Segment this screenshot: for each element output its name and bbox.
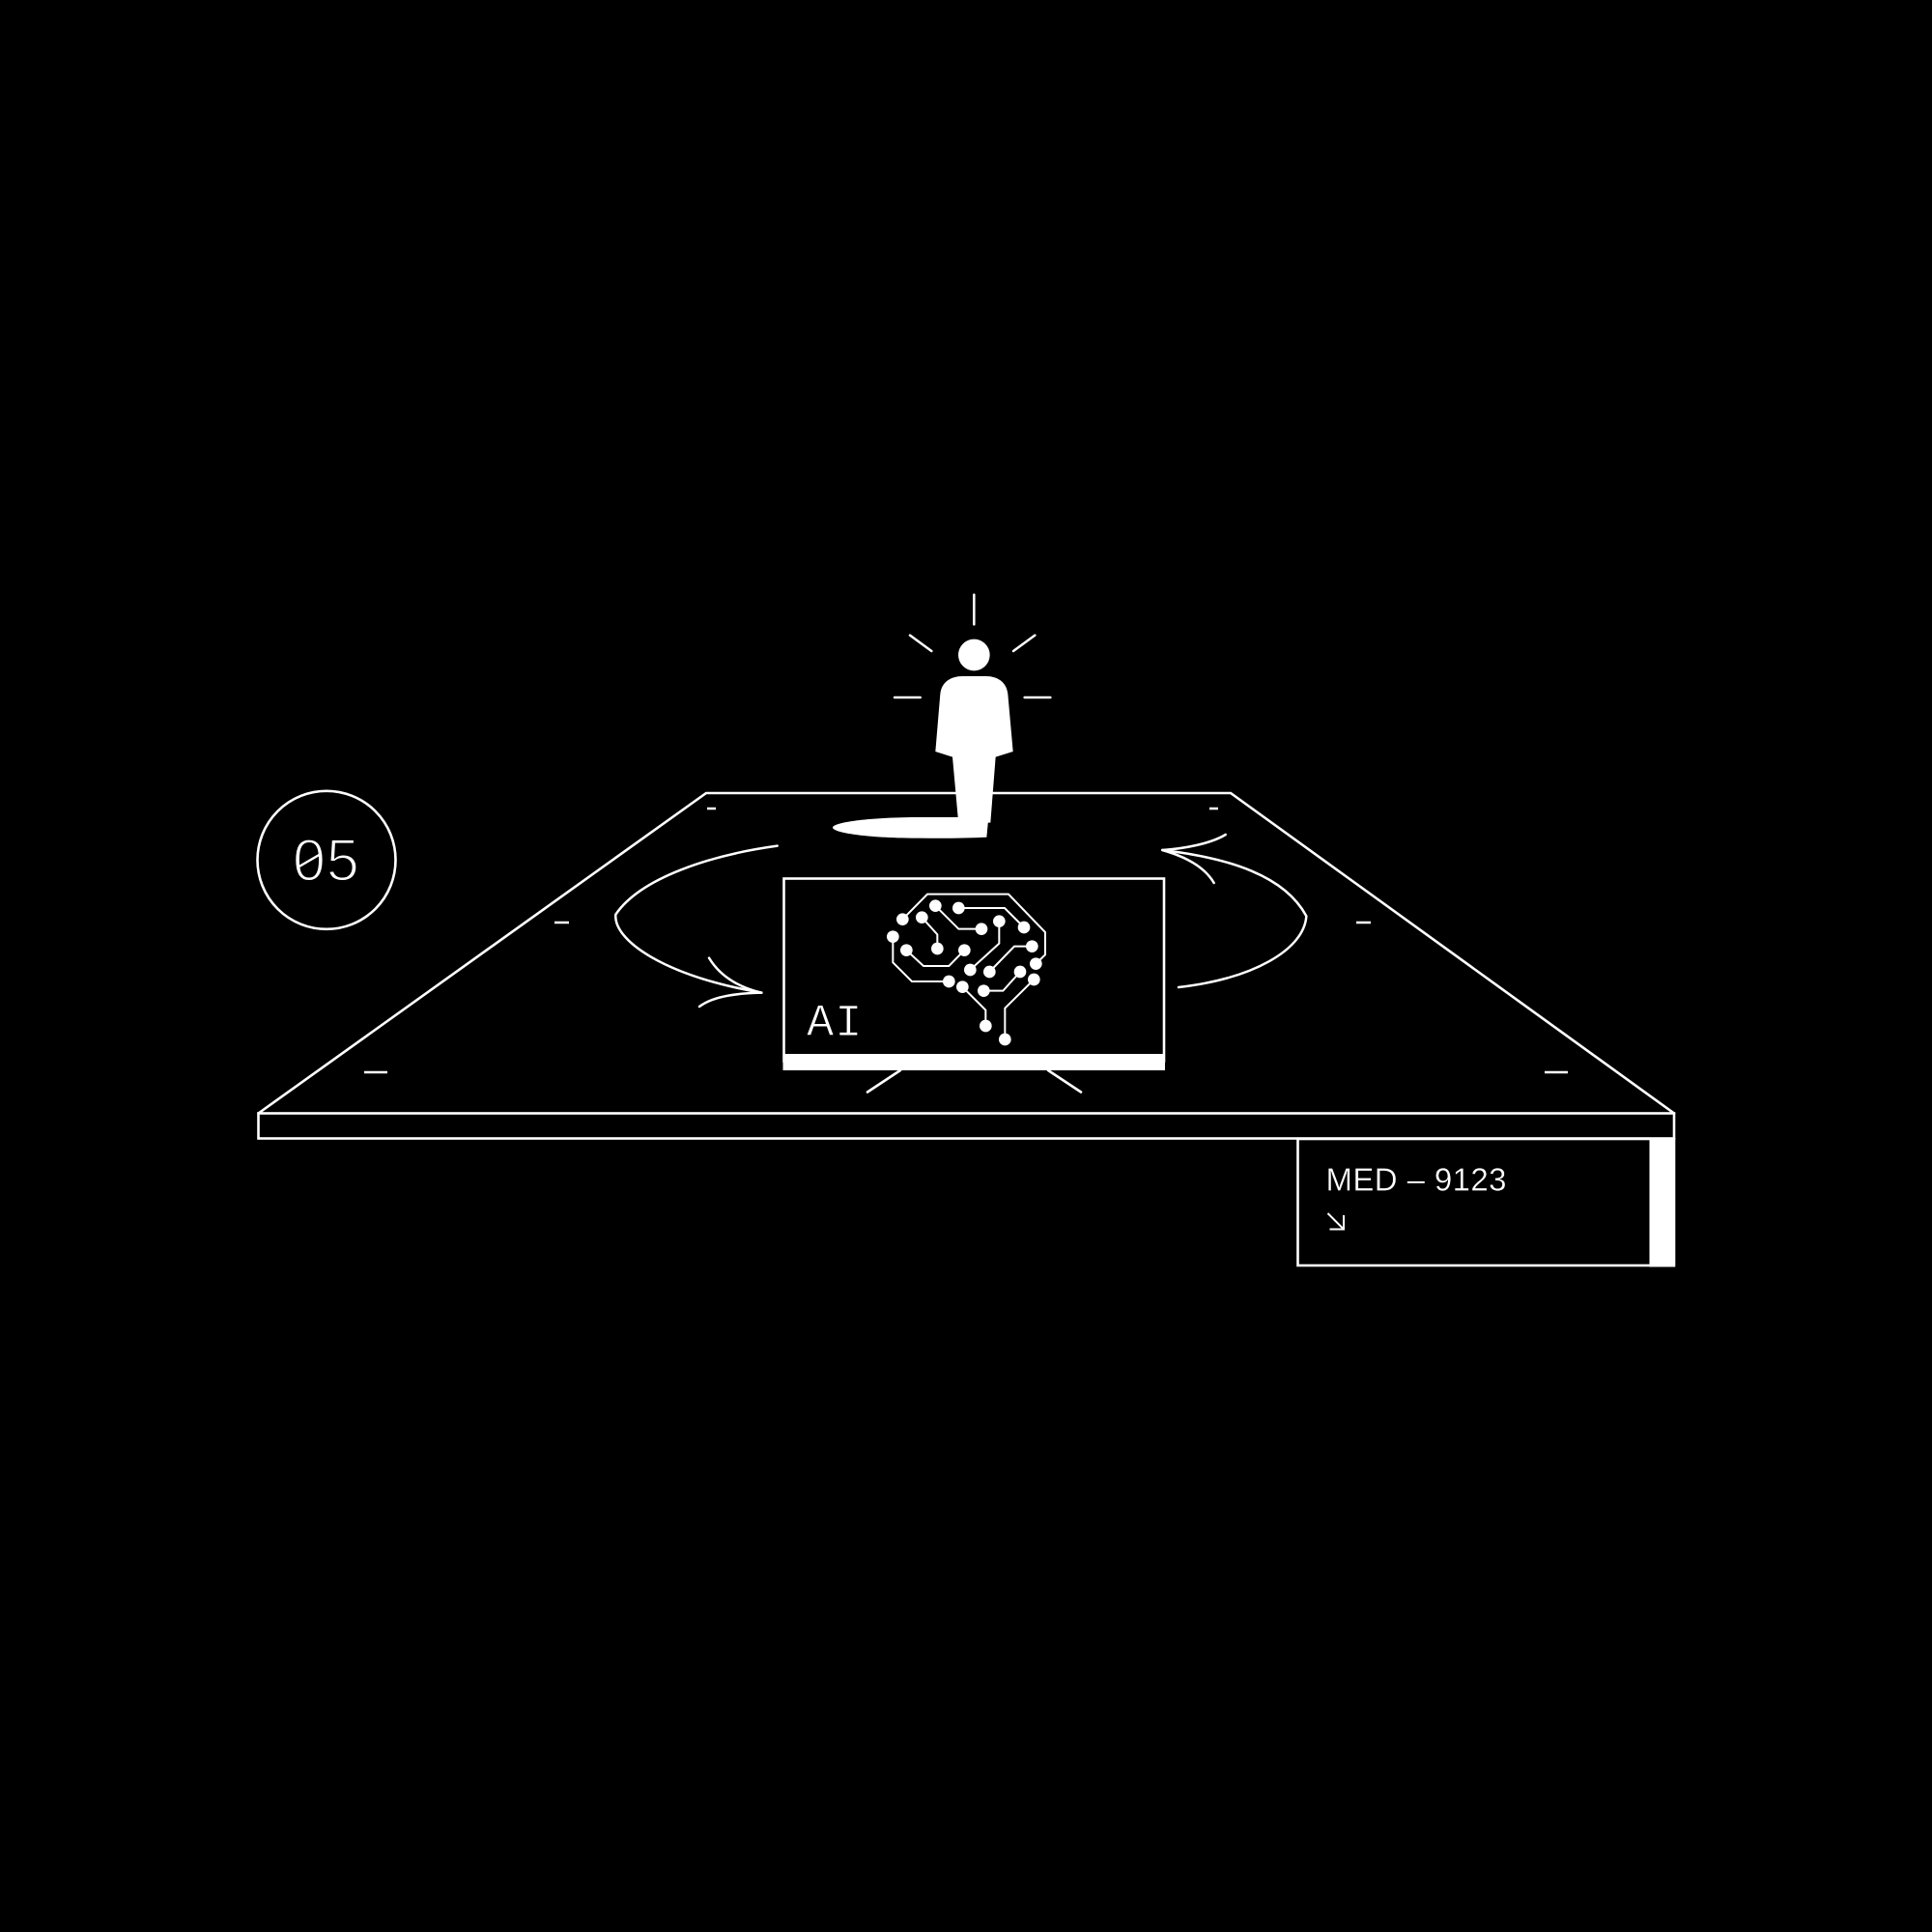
card code text: MED – 9123: [1325, 1161, 1507, 1198]
arrow: left rotation: [615, 846, 778, 1007]
radiating lines: [895, 595, 1050, 697]
AI label: AI: [807, 999, 863, 1050]
person body: [935, 676, 1013, 838]
icon: circuit brain: [887, 895, 1045, 1045]
icon: person with radiating lines: [833, 595, 1050, 838]
person head: [958, 639, 990, 670]
monitor stand legs: [867, 1070, 1081, 1092]
arrow: right rotation: [1162, 835, 1306, 987]
icon: down-right arrow: [1327, 1213, 1344, 1229]
label card: [1298, 1139, 1675, 1267]
monitor base bar: [782, 1054, 1165, 1070]
table top surface: [259, 793, 1674, 1113]
table edge: [259, 1113, 1674, 1138]
person shadow: [833, 817, 988, 838]
monitor: [782, 879, 1165, 1092]
card accent bar: [1650, 1139, 1675, 1267]
badge number: 05: [293, 827, 360, 893]
number badge: [257, 791, 396, 929]
screen frame: [784, 879, 1164, 1061]
table: [259, 793, 1674, 1138]
surface tick marks: [364, 809, 1568, 1072]
